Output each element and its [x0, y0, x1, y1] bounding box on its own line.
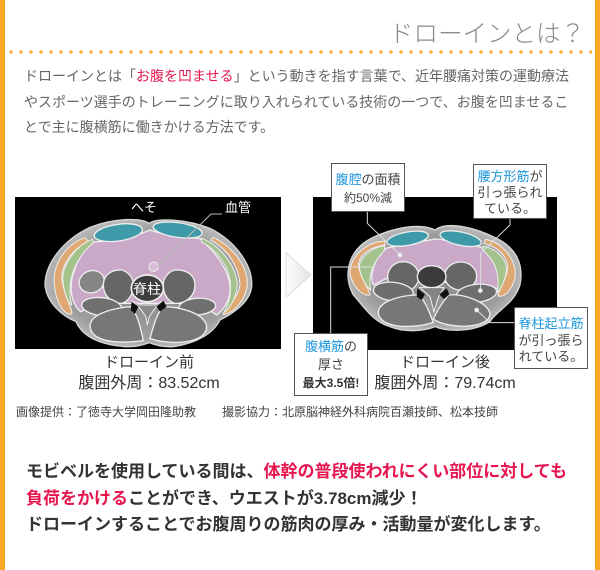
callout: abdominal cavity	[332, 164, 404, 212]
caption: after	[374, 354, 516, 392]
caption: before	[78, 354, 220, 392]
intro text: ドローインとは「お腹を凹ませる」という動きを指す言葉で、近年腰痛対策の運動療法	[24, 68, 569, 84]
arrow	[286, 253, 311, 297]
summary text: ドローインすることでお腹周りの筋肉の厚み・活動量が変化します。	[26, 515, 551, 534]
abdominal muscles	[93, 221, 144, 244]
callout: abdominal cavity: 腹腔の面積	[335, 172, 401, 187]
label: spine: 脊柱	[133, 281, 161, 297]
callout: quadratus lumborum: 腰方形筋が	[477, 169, 543, 184]
caption: before: 腹囲外周：83.52cm	[78, 375, 220, 392]
intro text	[24, 68, 569, 135]
callout: transversus abdominis: 厚さ	[318, 357, 344, 372]
organs	[372, 262, 497, 326]
callout: erector spinae	[514, 308, 588, 368]
title: ドローインとは？	[389, 21, 585, 48]
body outline	[45, 220, 252, 347]
callout: erector spinae: れている。	[519, 349, 583, 364]
callout: transversus abdominis	[294, 334, 368, 396]
callout: quadratus lumborum: 引っ張られ	[477, 185, 543, 200]
callout: quadratus lumborum: ている。	[484, 201, 536, 216]
after scan	[313, 197, 557, 350]
caption: after: 腹囲外周：79.74cm	[374, 375, 516, 392]
image credit: 画像提供：了徳寺大学岡田隆助教 撮影協力：北原脳神経外科病院百瀬技師、松本技師	[16, 405, 498, 419]
caption: after: ドローイン後	[400, 354, 490, 371]
body outline	[348, 226, 521, 331]
callout: erector spinae: が引っ張ら	[518, 333, 584, 348]
dotted divider	[9, 50, 592, 54]
vertebra	[420, 288, 444, 312]
label: navel: へそ	[131, 200, 157, 215]
caption: before: ドローイン前	[104, 354, 194, 371]
callout: transversus abdominis: 最大3.5倍!	[303, 375, 359, 390]
abdominal cavity	[71, 230, 230, 315]
organs	[76, 267, 216, 342]
vertebra	[132, 301, 163, 325]
summary text	[26, 462, 567, 534]
abdominal cavity	[372, 239, 499, 289]
intro text: やスポーツ選手のトレーニングに取り入れられている技術の一つで、お腹を凹ませるこ	[24, 94, 568, 110]
oblique muscles	[350, 241, 385, 295]
callout: transversus abdominis: 腹横筋の	[305, 339, 357, 354]
summary text: 負荷をかけることができ、ウエストが3.78cm減少！	[26, 488, 422, 508]
callout: quadratus lumborum	[474, 164, 546, 218]
intro text: とで主に腹横筋に働きかける方法です。	[24, 119, 274, 135]
blood vessel marker	[149, 262, 158, 271]
abdominal muscles	[386, 228, 429, 249]
summary text: モビベルを使用している間は、体幹の普段使われにくい部位に対しても	[26, 462, 567, 481]
scan diagrams	[15, 163, 588, 396]
leader lines	[331, 212, 517, 333]
callout: erector spinae: 脊柱起立筋	[518, 316, 584, 331]
callout: abdominal cavity: 約50%減	[344, 190, 392, 205]
oblique muscles	[54, 238, 88, 314]
label: blood vessel: 血管	[225, 200, 251, 215]
before scan	[15, 197, 281, 349]
